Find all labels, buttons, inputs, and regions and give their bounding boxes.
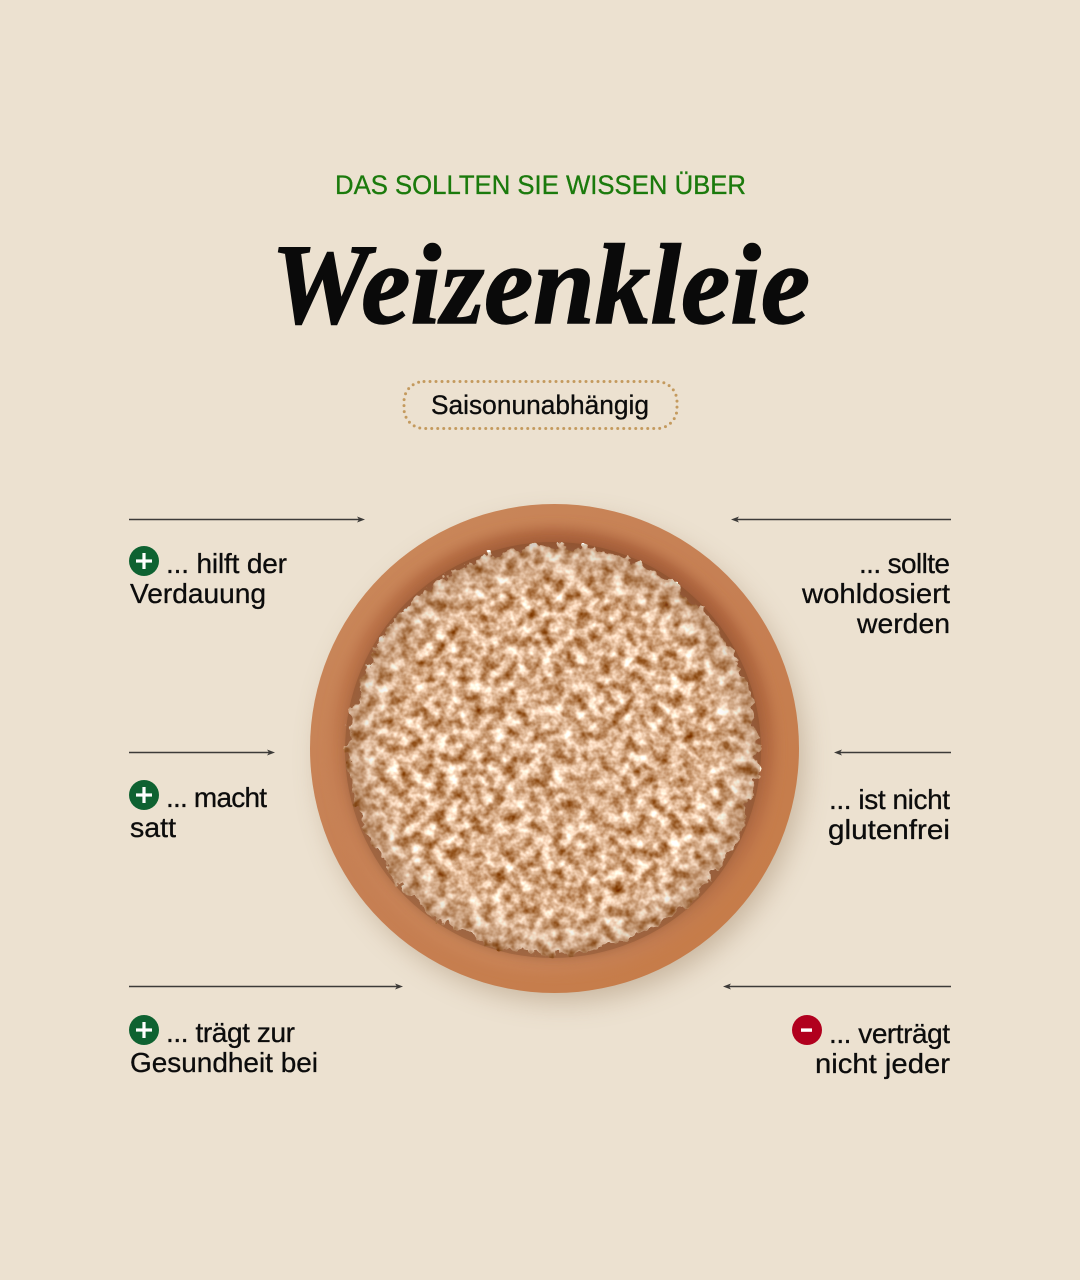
item: macht satt: ... macht [166,782,267,813]
icon: minus [792,1015,822,1045]
item: hilft der Verdauung: ... hilft der [166,548,287,579]
arrow: top left [129,516,365,522]
icon: plus [129,780,159,810]
item: hilft der Verdauung [129,546,287,609]
title: Weizenkleie [271,221,810,348]
season badge [404,382,677,428]
bowl with wheat bran [310,504,803,1001]
item: hilft der Verdauung: Verdauung [130,578,266,609]
icon: plus [129,1015,159,1045]
item: sollte wohldosiert werden [801,548,950,639]
item: verträgt nicht jeder: ... verträgt [829,1018,950,1049]
arrow: top right [731,516,951,522]
arrow: middle right [834,750,951,756]
item: sollte wohldosiert werden: werden [856,608,950,639]
item: verträgt nicht jeder [792,1015,950,1079]
subtitle: DAS SOLLTEN SIE WISSEN ÜBER [335,170,746,200]
item: macht satt [129,780,267,843]
item: sollte wohldosiert werden: wohldosiert [801,578,950,609]
item: trägt zur Gesundheit bei [129,1015,318,1078]
item: ist nicht glutenfrei [828,784,950,845]
item: trägt zur Gesundheit bei: Gesundheit bei [130,1047,318,1078]
arrow: bottom left [129,984,403,990]
season badge: Saisonunabhängig [431,390,649,420]
arrow: bottom right [723,984,951,990]
item: ist nicht glutenfrei: glutenfrei [828,814,950,845]
item: verträgt nicht jeder: nicht jeder [815,1048,950,1079]
arrow: middle left [129,750,275,756]
bran flakes [349,546,757,954]
item: macht satt: satt [130,812,176,843]
item: ist nicht glutenfrei: ... ist nicht [829,784,950,815]
icon: plus [129,546,159,576]
item: trägt zur Gesundheit bei: ... trägt zur [166,1017,295,1048]
item: sollte wohldosiert werden: ... sollte [859,548,950,579]
